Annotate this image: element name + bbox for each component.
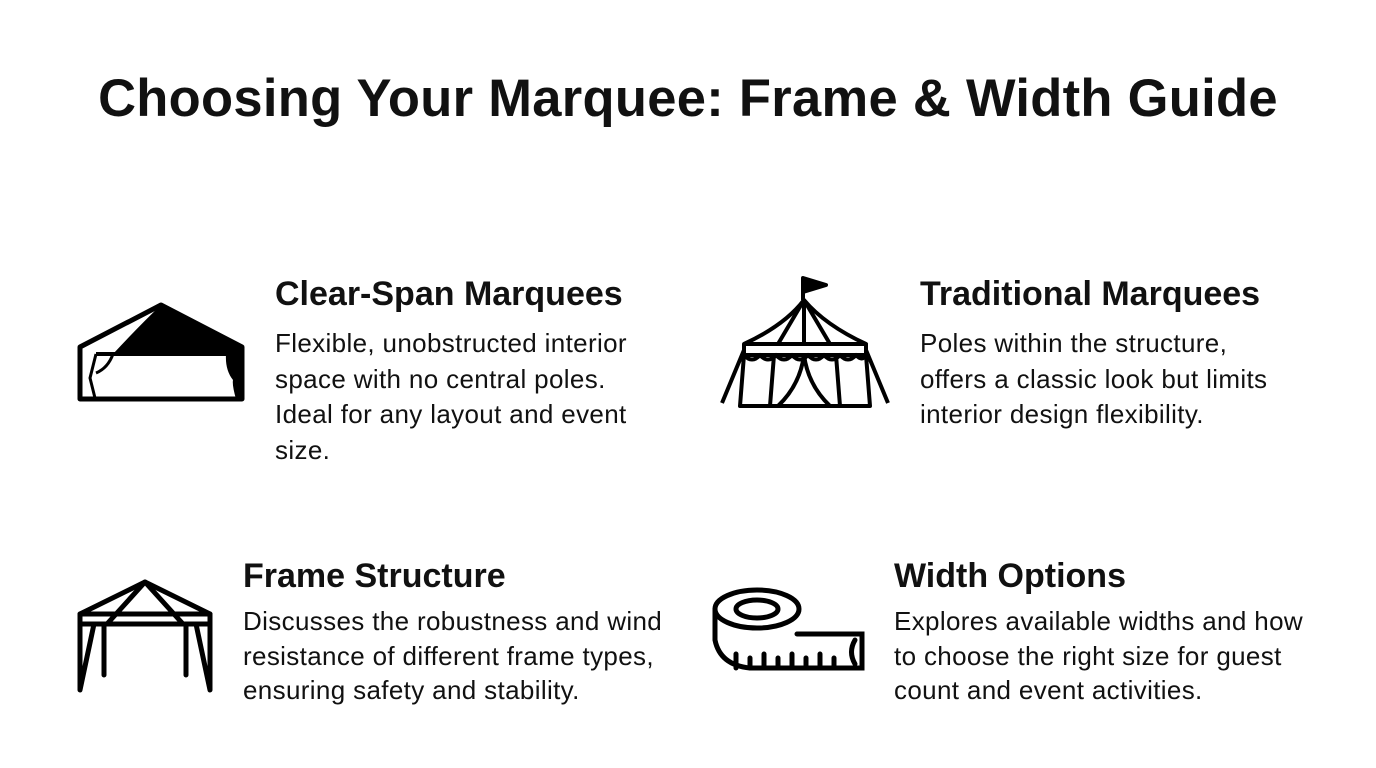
icon: clear-span marquee bbox=[78, 302, 244, 402]
text: frame: resistance of different frame types, bbox=[243, 640, 654, 670]
text: frame bbox=[243, 557, 662, 705]
text: traditional: interior design flexibility. bbox=[920, 399, 1204, 429]
text: clear-span: Flexible, unobstructed interior bbox=[275, 328, 627, 358]
text: clear-span bbox=[275, 275, 627, 464]
text: traditional bbox=[920, 275, 1267, 429]
text: width: Explores available widths and how bbox=[894, 606, 1303, 636]
text: width: Width Options bbox=[894, 557, 1126, 595]
text: traditional: offers a classic look but limits bbox=[920, 364, 1267, 394]
text: clear-span: Clear-Span Marquees bbox=[275, 275, 623, 313]
icon: measuring tape bbox=[712, 588, 864, 670]
text: frame: Frame Structure bbox=[243, 557, 506, 595]
icon: frame structure bbox=[78, 580, 212, 692]
text: traditional: Traditional Marquees bbox=[920, 275, 1260, 313]
title: Choosing Your Marquee: Frame & Width Guide bbox=[98, 69, 1278, 128]
text: width bbox=[894, 557, 1303, 705]
text: width: to choose the right size for guest bbox=[894, 640, 1282, 670]
icon: traditional tent bbox=[720, 276, 890, 408]
text: traditional: Poles within the structure, bbox=[920, 328, 1227, 358]
text: frame: ensuring safety and stability. bbox=[243, 675, 580, 705]
text: width: count and event activities. bbox=[894, 675, 1203, 705]
text: clear-span: space with no central poles. bbox=[275, 364, 606, 394]
text: clear-span: Ideal for any layout and event bbox=[275, 399, 627, 429]
text: frame: Discusses the robustness and wind bbox=[243, 606, 662, 636]
text: clear-span: size. bbox=[275, 434, 330, 464]
